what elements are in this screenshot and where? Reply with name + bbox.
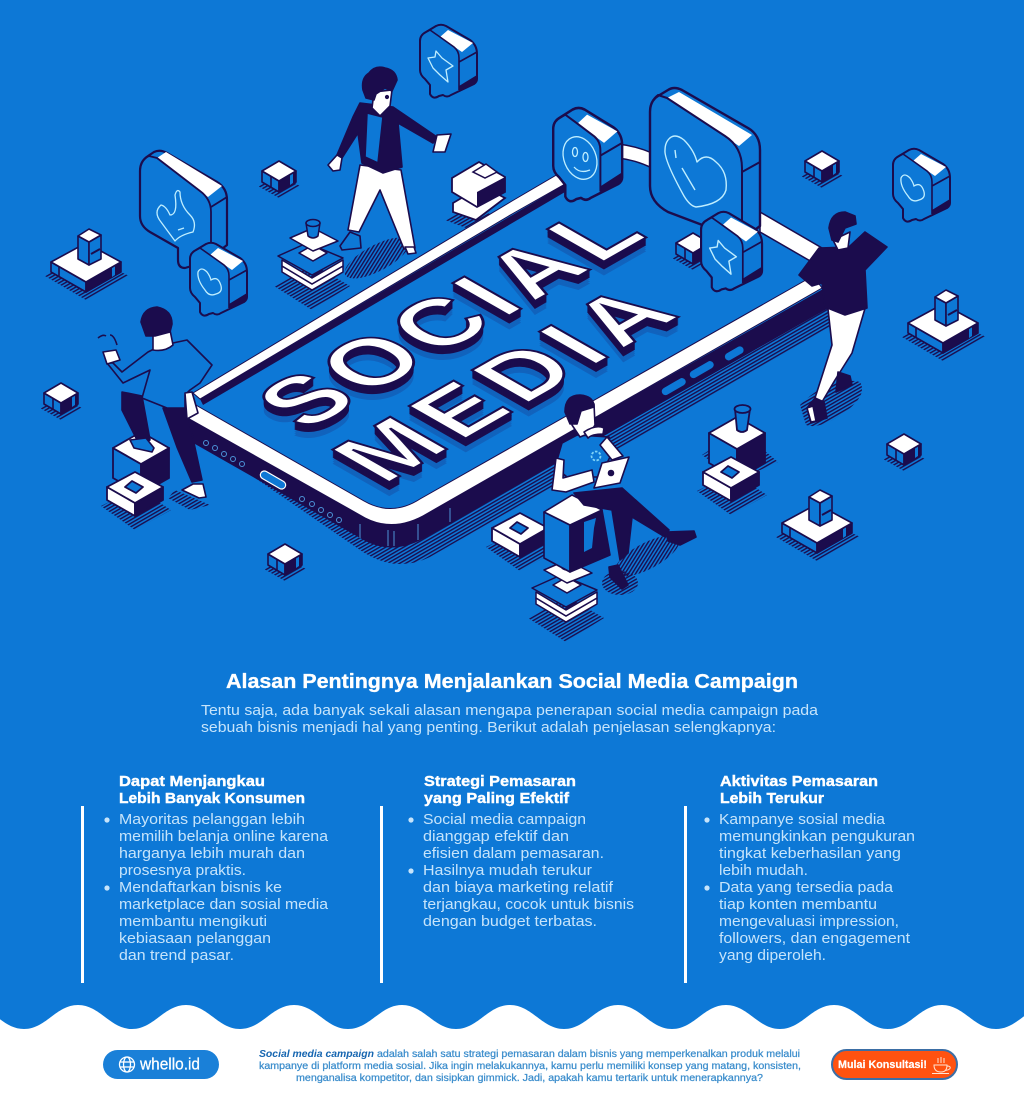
- column 1 heading: Dapat Menjangkau: [119, 773, 265, 790]
- intro paragraph: sebuah bisnis menjadi hal yang penting. Berikut adalah penjelasan selengkapnya:: [201, 719, 776, 736]
- column 3 bullets: tiap konten membantu: [719, 896, 877, 913]
- column 3 bullets: mengevaluasi impression,: [719, 913, 899, 930]
- column 2 heading: Strategi Pemasaran: [424, 773, 576, 790]
- column 2 heading: yang Paling Efektif: [424, 790, 570, 807]
- column 3 bullets: followers, dan engagement: [719, 930, 911, 947]
- panel: column 3: [684, 773, 915, 983]
- phone speaker dots: [204, 440, 450, 546]
- tower base bottom right: [776, 490, 860, 561]
- tower base left: [45, 229, 129, 300]
- box with cup right: [702, 405, 778, 480]
- phone side buttons: [659, 344, 746, 397]
- phone left edge: [193, 170, 565, 399]
- column 1 bullets: prosesnya praktis.: [119, 862, 246, 879]
- icon: star: [428, 51, 453, 82]
- crate right: [697, 457, 767, 515]
- footer wave: [0, 1005, 1024, 1096]
- column 2 bullets: dan biaya marketing relatif: [423, 879, 614, 896]
- column 2 bullets: Social media campaign: [423, 811, 586, 828]
- column 1 divider bar: [81, 806, 84, 983]
- cube behind star bubble: [672, 233, 714, 270]
- icon: heart: [198, 269, 221, 295]
- heading: Alasan Pentingnya Menjalankan Social Media Campaign: [226, 671, 798, 693]
- speech bubble: heart right: [893, 149, 950, 222]
- consultation button: [832, 1050, 957, 1079]
- speech bubble: big chat: [140, 151, 227, 268]
- footer paragraph: adalah salah satu strategi pemasaran dalam bisnis yang memperkenalkan produk melalui: [377, 1049, 800, 1060]
- icon: big heart: [665, 136, 726, 207]
- column 3 bullets: memungkinkan pengukuran: [719, 828, 915, 845]
- column 2 bullets: dengan budget terbatas.: [423, 913, 597, 930]
- icon: star: [710, 240, 736, 274]
- speech bubble: star right: [701, 212, 762, 291]
- column 1 heading: [119, 773, 305, 807]
- tower base right: [902, 290, 986, 361]
- icon: globe: [120, 1057, 134, 1072]
- column 1 bullets: membantu mengikuti: [119, 913, 267, 930]
- column 3 bullets: [704, 811, 915, 964]
- big letters SOCIAL: SOCIAL: [233, 190, 673, 442]
- phone charge port: [259, 470, 287, 490]
- person: sitting with laptop: [544, 395, 696, 595]
- column 3 heading: [720, 773, 878, 807]
- crate left: [101, 472, 171, 530]
- paper stack with cup bottom: [528, 552, 604, 642]
- column 1 bullets: [104, 811, 329, 964]
- column 3 bullets: Data yang tersedia pada: [719, 879, 894, 896]
- column 3 heading: Lebih Terukur: [720, 790, 824, 807]
- phone back arc: [618, 144, 652, 168]
- column 1 bullets: kebiasaan pelanggan: [119, 930, 271, 947]
- crate middle: [486, 513, 556, 571]
- speech bubble: small heart left: [190, 243, 247, 316]
- phone back edge right: [760, 212, 822, 262]
- person: left, back view with phone: [98, 307, 212, 510]
- intro paragraph: [201, 702, 819, 736]
- phone side wall: [188, 284, 832, 548]
- cube bottom: [264, 544, 306, 581]
- logo pill: [103, 1050, 219, 1079]
- cube top right: [801, 151, 843, 188]
- column 2 bullets: dianggap efektif dan: [423, 828, 569, 845]
- footer paragraph: Social media campaign: [259, 1049, 374, 1060]
- icon: coffee cup: [932, 1057, 950, 1074]
- column 3 bullets: tingkat keberhasilan yang: [719, 845, 901, 862]
- column 1 bullets: Mayoritas pelanggan lebih: [119, 811, 305, 828]
- icon: heart: [901, 175, 924, 201]
- speech bubble: big heart: [650, 88, 760, 240]
- phone left edge navy: [200, 184, 565, 405]
- cube top left: [258, 161, 300, 198]
- person: standing with phone: [328, 67, 451, 286]
- column 1 bullets: harganya lebih murah dan: [119, 845, 305, 862]
- panel: column 1: [81, 773, 329, 983]
- column 1 bullets: Mendaftarkan bisnis ke: [119, 879, 282, 896]
- column 1 heading: Lebih Banyak Konsumen: [119, 790, 305, 807]
- shadow of phone: [188, 300, 832, 564]
- cube right: [883, 434, 925, 471]
- intro paragraph: Tentu saja, ada banyak sekali alasan mengapa penerapan social media campaign pada: [201, 702, 819, 719]
- column 1 bullets: memilih belanja online karena: [119, 828, 329, 845]
- stacked crates top: [445, 162, 505, 228]
- big letters MEDIA: MEDIA: [310, 269, 707, 496]
- icon: shopping bag: [157, 191, 194, 241]
- speech bubble: star top: [420, 25, 477, 98]
- column 1 bullets: dan trend pasar.: [119, 947, 234, 964]
- speech bubble: smile: [553, 108, 622, 201]
- footer paragraph: kampanye di platform media sosial. Jika ingin melakukannya, kamu perlu memiliki konsep yang matang, konsisten,: [259, 1061, 801, 1072]
- phone body: [186, 144, 832, 548]
- column 3 bullets: Kampanye sosial media: [719, 811, 886, 828]
- footer paragraph: [259, 1049, 801, 1084]
- box under left person: [113, 432, 169, 494]
- column 3 divider bar: [684, 806, 687, 983]
- paper stack with cup top: [274, 220, 350, 310]
- column 1 bullets: marketplace dan sosial media: [119, 896, 329, 913]
- cube left: [40, 383, 82, 420]
- column 2 divider bar: [380, 806, 383, 983]
- consultation button: Mulai Konsultasi!: [838, 1059, 927, 1071]
- logo pill: whello.id: [139, 1056, 200, 1074]
- column 2 bullets: Hasilnya mudah terukur: [423, 862, 592, 879]
- column 3 heading: Aktivitas Pemasaran: [720, 773, 878, 790]
- column 2 heading: [424, 773, 576, 807]
- column 2 bullets: terjangkau, cocok untuk bisnis: [423, 896, 634, 913]
- column 2 bullets: efisien dalam pemasaran.: [423, 845, 604, 862]
- column 3 bullets: yang diperoleh.: [719, 947, 826, 964]
- column 3 bullets: lebih mudah.: [719, 862, 808, 879]
- panel: column 2: [380, 773, 634, 983]
- footer paragraph: menganalisa kompetitor, dan sisipkan gimmick. Jadi, apakah kamu tertarik untuk menerapkannya?: [296, 1073, 763, 1084]
- person: right, hand on head: [799, 212, 887, 426]
- phone front edge: [186, 276, 822, 525]
- icon: smiley: [557, 132, 603, 184]
- column 2 bullets: [408, 811, 634, 930]
